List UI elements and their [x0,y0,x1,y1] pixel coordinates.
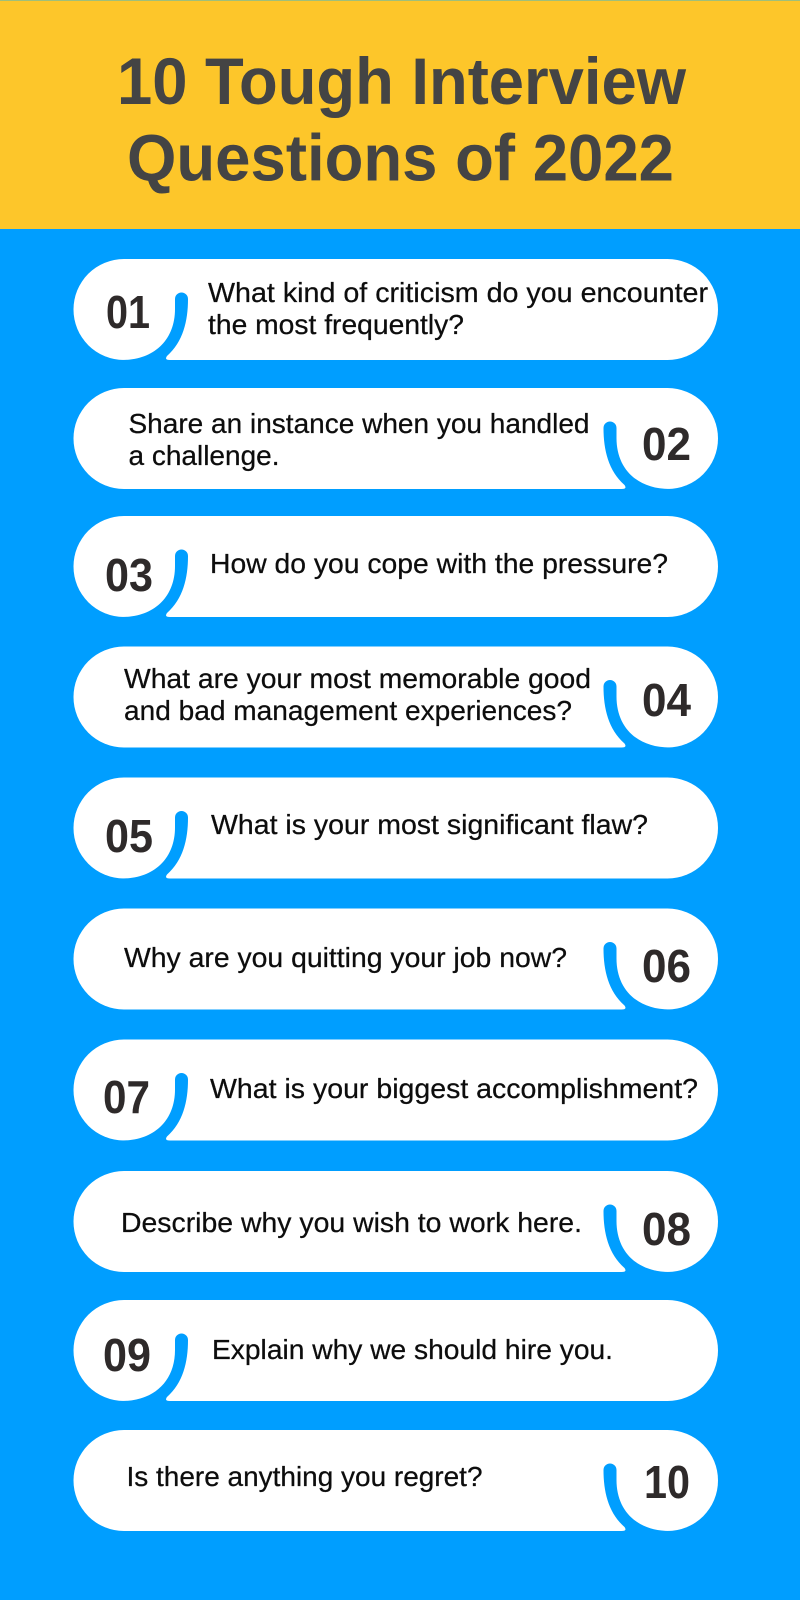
number 10: 10 [644,1456,690,1508]
question text [128,408,590,471]
panel: question 02 [74,388,718,490]
panel: question 07 [74,1040,718,1142]
pill shape [74,1430,718,1532]
pill shape [74,908,718,1010]
question text: What is your most significant flaw? [211,809,648,840]
number 07: 07 [103,1071,150,1123]
question text: What are your most memorable good [124,663,591,694]
question text: the most frequently? [208,309,464,340]
number 05: 05 [105,810,153,862]
question text: Describe why you wish to work here. [121,1207,582,1238]
panel: question 08 [74,1171,718,1273]
number 06: 06 [642,940,691,992]
question text: a challenge. [128,440,280,471]
question text: Why are you quitting your job now? [124,942,567,973]
panel: question 01 [74,259,718,361]
number 01: 01 [106,286,150,338]
panel: question 05 [74,778,718,880]
question text: Share an instance when you handled [128,408,590,439]
pill shape [74,1171,718,1273]
panel: question 10 [74,1430,718,1532]
pill shape [74,778,718,880]
question text [124,663,591,726]
question text: Is there anything you regret? [126,1461,483,1492]
title: 10 Tough Interview [117,44,687,118]
number 02: 02 [642,418,691,470]
number 09: 09 [103,1329,151,1381]
pill shape [74,259,718,361]
number 08: 08 [642,1203,691,1255]
panel: question 09 [74,1300,718,1402]
pill shape [74,646,718,748]
panel: question 04 [74,646,718,748]
question text: What kind of criticism do you encounter [208,277,708,308]
panel: question 06 [74,908,718,1010]
title [117,44,687,194]
question text: and bad management experiences? [124,695,572,726]
pill shape [74,1300,718,1402]
number 04: 04 [642,674,691,726]
pill shape [74,516,718,618]
question text: Explain why we should hire you. [212,1334,613,1365]
question text [208,277,708,340]
question text: How do you cope with the pressure? [210,548,668,579]
pill shape [74,388,718,490]
pill shape [74,1040,718,1142]
header band [0,0,800,229]
number 03: 03 [105,549,153,601]
title: Questions of 2022 [127,120,674,194]
question text: What is your biggest accomplishment? [210,1073,698,1104]
panel: question 03 [74,516,718,618]
